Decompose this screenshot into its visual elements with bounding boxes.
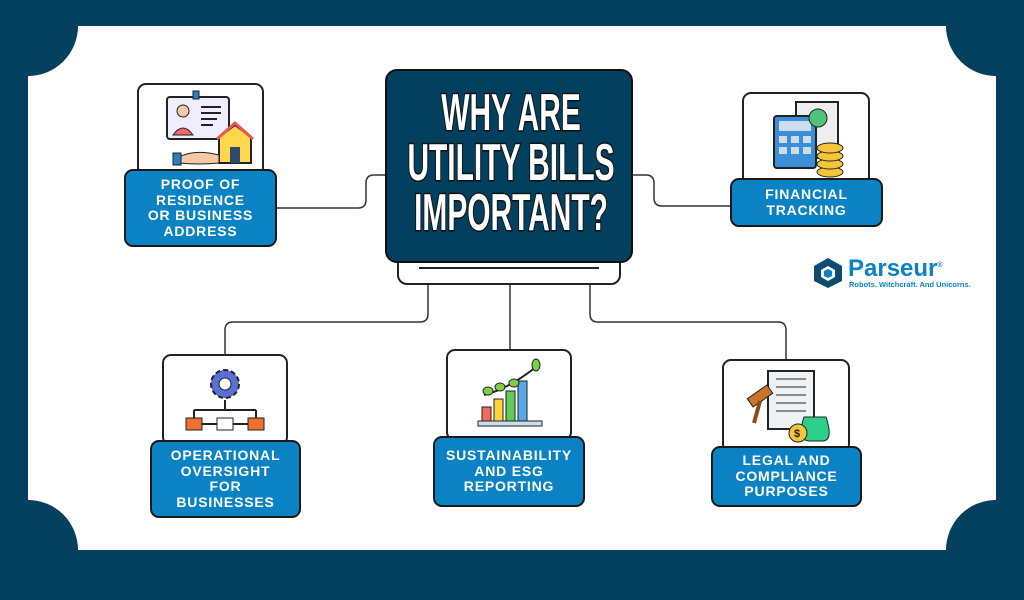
label: [124, 169, 277, 247]
label: PROOF OF: [161, 176, 240, 192]
title: IMPORTANT?: [414, 184, 608, 242]
panel: proof of residence: [124, 83, 277, 247]
label: COMPLIANCE: [735, 468, 838, 484]
logo: Parseur: Parseur®: [848, 255, 943, 282]
label: LEGAL AND: [742, 452, 831, 468]
icon: gear flow: [162, 354, 288, 446]
label: OR BUSINESS: [148, 207, 253, 223]
icon: id card and house: [137, 83, 264, 177]
icon: gavel and money bag: $: [794, 428, 800, 440]
label: OPERATIONAL: [171, 447, 280, 463]
label: OVERSIGHT: [181, 462, 270, 478]
label: [711, 446, 862, 507]
label: ADDRESS: [163, 222, 238, 238]
label: REPORTING: [464, 478, 554, 494]
label: RESIDENCE: [156, 192, 245, 208]
label: PURPOSES: [744, 483, 829, 499]
logo: Parseur: [814, 255, 971, 289]
title: [385, 69, 633, 263]
title: UTILITY BILLS: [407, 134, 615, 192]
label: FOR: [210, 478, 241, 494]
label: AND ESG: [474, 463, 544, 479]
title: WHY ARE: [441, 84, 581, 142]
stand: [397, 249, 621, 285]
label: FINANCIAL: [765, 186, 848, 202]
label: [433, 436, 585, 507]
label: SUSTAINABILITY: [446, 447, 572, 463]
panel: operational oversight: [150, 354, 301, 518]
logo: Parseur: Robots. Witchcraft. And Unicorns.: [849, 280, 971, 289]
panel: sustainability: [433, 349, 585, 507]
icon: calculator and coins: [742, 92, 870, 186]
center title panel: [385, 69, 633, 285]
panel: financial tracking: [730, 92, 883, 227]
icon: gavel and money bag: [722, 359, 850, 453]
panel: legal and compliance: [711, 359, 862, 507]
icon: growing bar chart: [446, 349, 572, 441]
label: BUSINESSES: [176, 494, 275, 510]
label: [150, 440, 301, 518]
label: [730, 178, 883, 227]
label: TRACKING: [766, 202, 847, 218]
